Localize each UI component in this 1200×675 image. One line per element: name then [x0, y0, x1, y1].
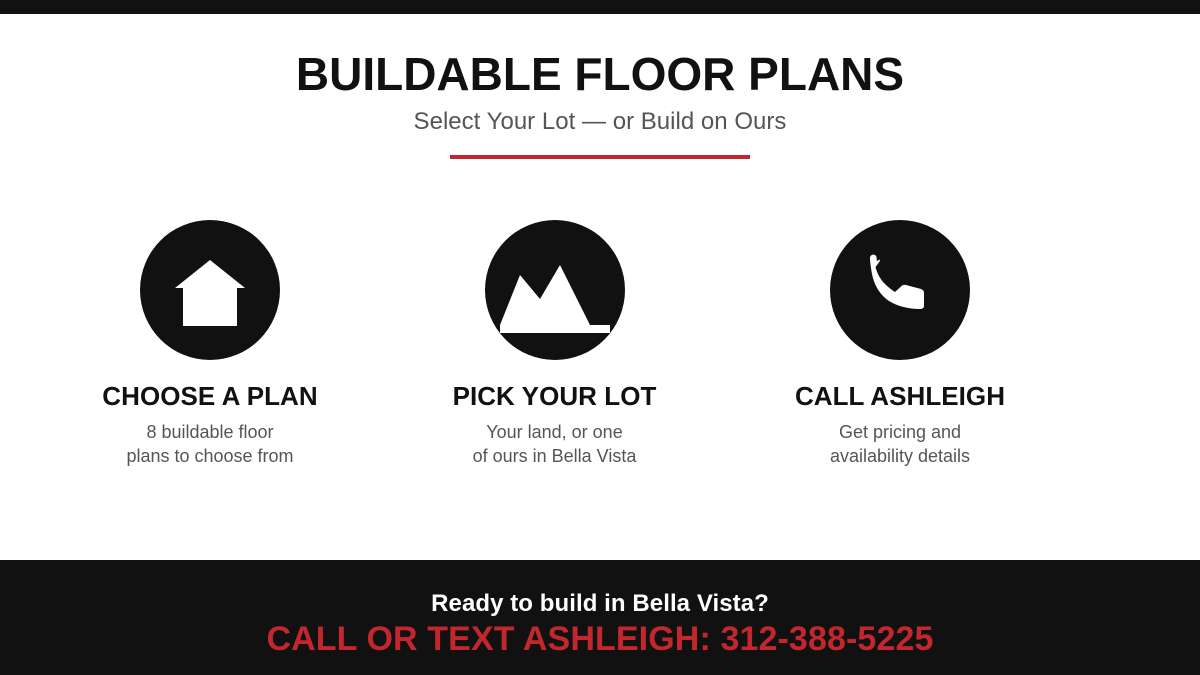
heading: pick your lot: PICK YOUR LOT [453, 381, 656, 411]
footer prompt: Ready to build in Bella Vista? [431, 590, 769, 617]
description: pick your lot [473, 422, 636, 466]
icon: phone [830, 220, 970, 360]
description: pick your lot: Your land, or one [486, 422, 623, 442]
description: call ashleigh: Get pricing and [839, 422, 961, 442]
red accent rule [450, 155, 750, 159]
title: BUILDABLE FLOOR PLANS [296, 48, 904, 100]
description: choose a plan: plans to choose from [126, 446, 294, 466]
icon: mountains [485, 220, 625, 360]
description: call ashleigh: availability details [830, 446, 970, 466]
heading: call ashleigh: CALL ASHLEIGH [795, 381, 1005, 411]
icon: house [140, 220, 280, 360]
description: choose a plan: 8 buildable floor [146, 422, 274, 442]
footer call to action: CALL OR TEXT ASHLEIGH: 312-388-5225 [266, 620, 934, 658]
description: pick your lot: of ours in Bella Vista [473, 446, 636, 466]
description: choose a plan [126, 422, 294, 466]
footer banner [0, 560, 1200, 675]
description: call ashleigh [830, 422, 970, 466]
subtitle: Select Your Lot — or Build on Ours [414, 108, 786, 135]
top bar [0, 0, 1200, 14]
heading: choose a plan: CHOOSE A PLAN [102, 381, 318, 411]
